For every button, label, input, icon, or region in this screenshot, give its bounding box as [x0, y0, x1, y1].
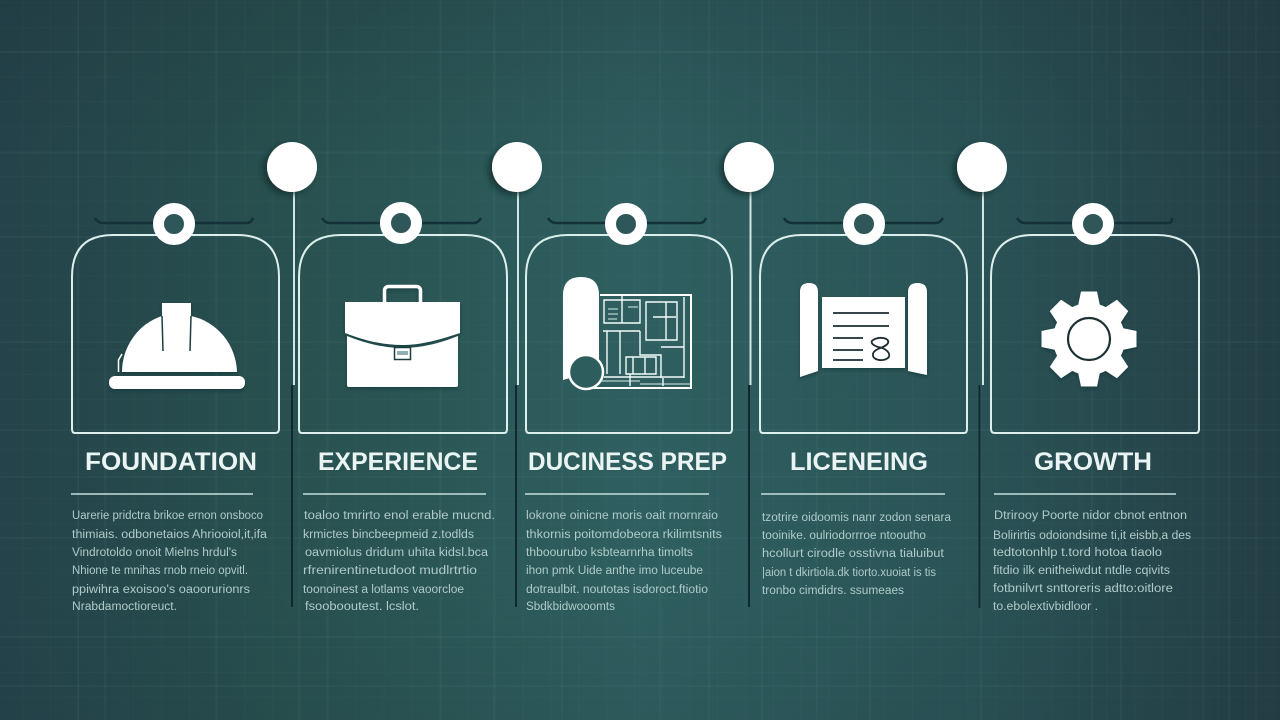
timeline connector 4 — [957, 142, 1007, 608]
timeline connector 2 — [492, 142, 542, 607]
text block: foundation: Nrabdamoctioreuct. — [72, 601, 177, 613]
text block: experience: oavmiolus dridum uhita kidsl.bca — [305, 547, 489, 559]
text block: foundation: ppiwihra exoisoo's oaoorurionrs — [72, 584, 250, 596]
text block: licensing: |aion t dkirtiola.dk tiorto.xuoiat is tis — [762, 567, 936, 579]
heading: licensing: LICENEING — [790, 448, 928, 476]
hanger bar: growth — [1017, 218, 1172, 223]
text block: business prep — [526, 510, 722, 613]
text block: licensing: tronbo cimdidrs. ssumeaes — [762, 585, 904, 597]
text block: experience: krmictes bincbeepmeid z.todlds — [303, 529, 474, 541]
text block: foundation: Uarerie pridctra brikoe ernon onsboco — [72, 510, 263, 522]
text block: experience — [303, 510, 495, 613]
text block: licensing: tooinike. oulriodorrroe ntooutho — [762, 530, 926, 542]
text block: growth: Dtrirooy Poorte nidor cbnot entnon — [994, 510, 1187, 522]
divider: foundation — [71, 493, 253, 495]
text block: experience: fsoobooutest. lcslot. — [305, 601, 419, 613]
text block: business prep: ihon pmk Uide anthe imo luceube — [526, 565, 703, 577]
panel: growth — [991, 208, 1199, 613]
hanger bar: licensing — [784, 218, 943, 223]
text block: growth — [993, 510, 1191, 613]
heading: foundation: FOUNDATION — [85, 448, 257, 476]
hanger bar: foundation — [95, 218, 253, 223]
text block: growth: fotbnilvrt snttoreris adtto:oitlore — [993, 583, 1173, 595]
text block: foundation: Vindrotoldo onoit Mielns hrdul's — [72, 547, 237, 559]
ring: experience — [386, 208, 416, 238]
card frame: licensing — [760, 235, 967, 433]
ring: licensing — [848, 208, 880, 240]
hanger bar: business prep — [548, 218, 706, 223]
text block: business prep: thkornis poitomdobeora rkilimtsnits — [526, 529, 722, 541]
heading: growth: GROWTH — [1034, 448, 1152, 476]
card frame: growth — [991, 235, 1199, 433]
text block: experience: toaloo tmrirto enol erable mucnd. — [304, 510, 495, 522]
card frame: experience — [299, 235, 507, 433]
panel: business prep — [525, 208, 732, 613]
text block: licensing: tzotrire oidoomis nanr zodon senara — [762, 512, 952, 524]
text block: business prep: lokrone oinicne moris oait rnornraio — [526, 510, 718, 522]
text block: foundation: thimiais. odbonetaios Ahriooiol,it,ifa — [72, 529, 268, 541]
timeline connector 1 — [267, 142, 317, 607]
text block: business prep: dotraulbit. noutotas isdoroct.ftiotio — [526, 584, 708, 596]
heading: business prep: DUCINESS PREP — [528, 448, 727, 476]
icon: license scroll — [800, 283, 927, 377]
text block: growth: Bolirirtis odoiondsime ti,it eisbb,a des — [993, 530, 1191, 542]
text block: experience: toonoinest a lotlams vaoorcloe — [303, 584, 464, 596]
text block: growth: to.ebolextivbidloor . — [993, 601, 1098, 613]
ring: growth — [1078, 208, 1108, 240]
text block: licensing: hcollurt cirodle osstivna tialuibut — [762, 548, 945, 560]
panel: foundation — [71, 208, 279, 613]
panel: licensing — [760, 208, 967, 597]
icon: briefcase — [345, 286, 460, 387]
ring: foundation — [158, 208, 190, 240]
panel: experience — [299, 208, 507, 613]
icon: blueprint — [563, 277, 691, 389]
icon: gear — [1042, 292, 1136, 386]
text block: growth: tedtotonhlp t.tord hotoa tiaolo — [993, 547, 1162, 559]
divider: growth — [994, 493, 1176, 495]
divider: licensing — [761, 493, 945, 495]
icon: hard hat — [109, 303, 245, 389]
divider: business prep — [525, 493, 709, 495]
text block: business prep: thboourubo ksbtearnrha timolts — [526, 547, 693, 559]
text block: foundation — [72, 510, 268, 613]
card frame: business prep — [526, 235, 732, 433]
text block: business prep: Sbdkbidwooomts — [526, 601, 615, 613]
text block: foundation: Nhione te mnihas rnob rneio opvitl. — [72, 565, 248, 577]
hanger bar: experience — [322, 218, 481, 223]
text block: experience: rfrenirentinetudoot mudlrtrtio — [303, 565, 477, 577]
text block: growth: fitdio ilk enitheiwdut ntdle cqivits — [993, 565, 1170, 577]
divider: experience — [303, 493, 486, 495]
ring: business prep — [610, 208, 642, 240]
text block: licensing — [762, 512, 952, 597]
timeline connector 3 — [724, 142, 774, 607]
card frame: foundation — [72, 235, 279, 433]
heading: experience: EXPERIENCE — [318, 448, 478, 476]
